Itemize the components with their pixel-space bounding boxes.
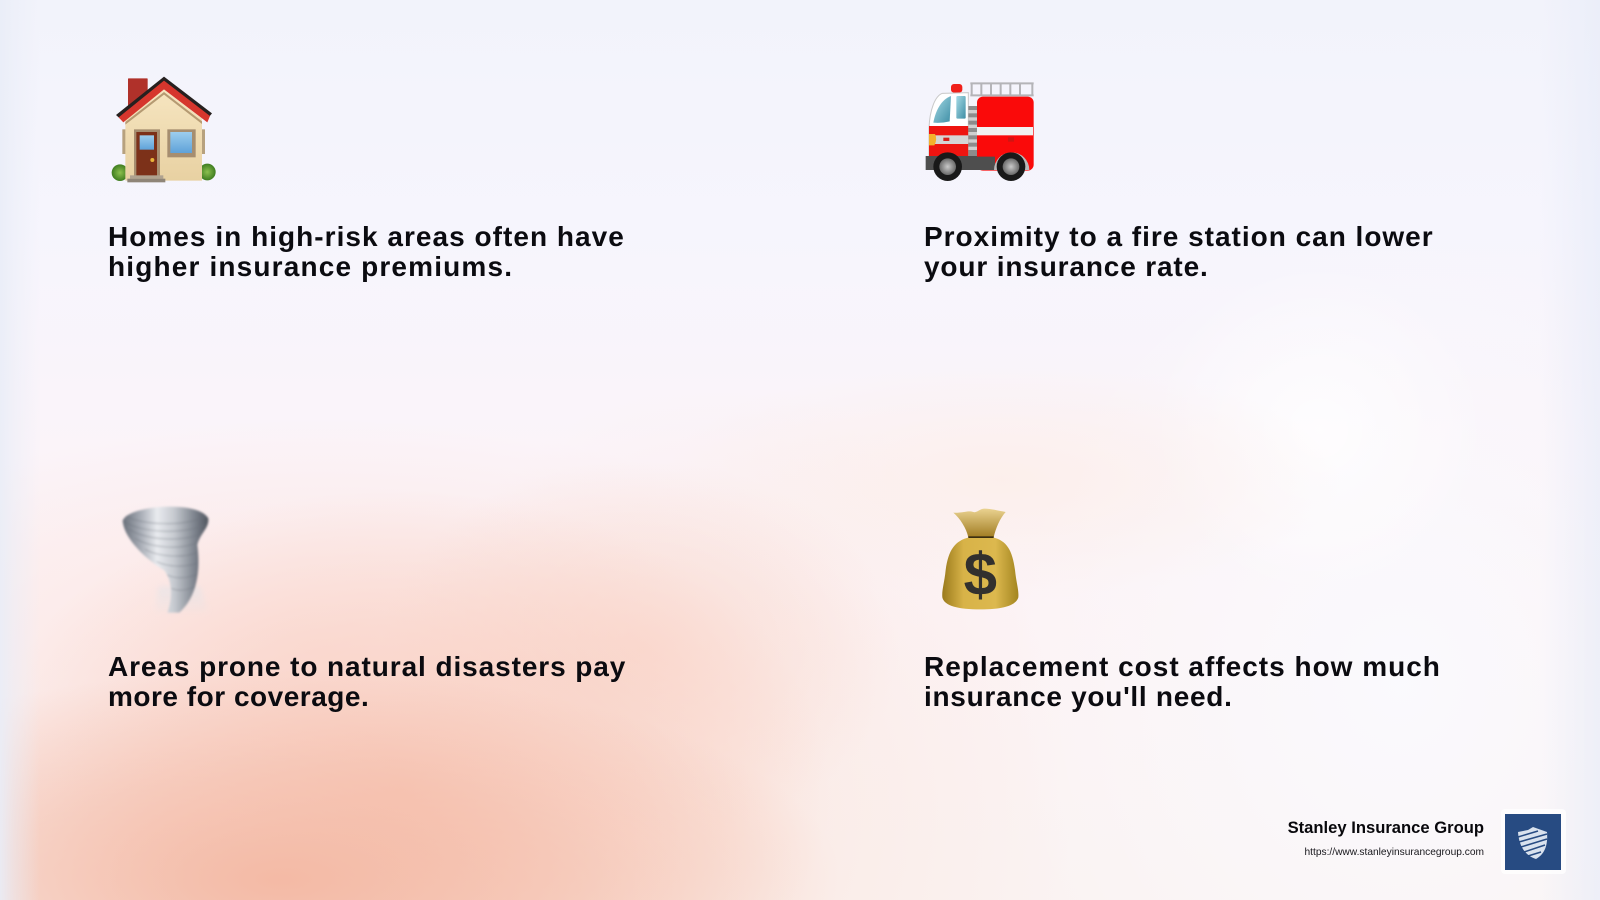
icon: money bag: $ [964,541,997,608]
icon: money bag [942,508,1018,610]
icon: fire engine [926,82,1034,181]
text: natural disasters: more for coverage. [108,681,369,712]
brand name: Stanley Insurance Group [1288,818,1484,837]
text: high-risk areas: higher insurance premiums. [108,251,513,282]
text: replacement cost: Replacement cost affects how much [924,651,1441,682]
icon: tornado [121,506,210,614]
text: fire station [924,221,1434,282]
text: natural disasters: Areas prone to natural disasters pay [108,651,626,682]
brand url: https://www.stanleyinsurancegroup.com [1304,847,1484,858]
text: fire station: your insurance rate. [924,251,1209,282]
text: high-risk areas [108,221,625,282]
logo: shield badge [1505,809,1566,874]
text: replacement cost: insurance you'll need. [924,681,1233,712]
text: fire station: Proximity to a fire station can lower [924,221,1434,252]
text: natural disasters [108,651,626,712]
icon: house [112,76,216,182]
text: replacement cost [924,651,1441,712]
text: high-risk areas: Homes in high-risk areas often have [108,221,625,252]
